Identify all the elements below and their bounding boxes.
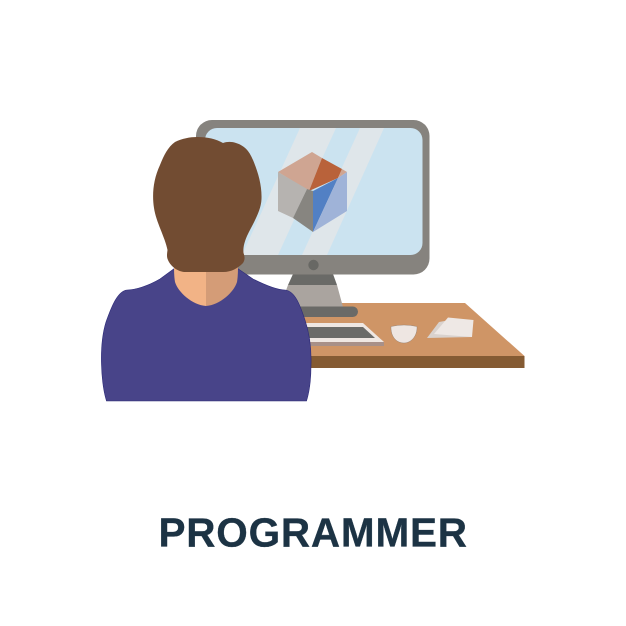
hair: [153, 137, 262, 272]
papers: [427, 318, 474, 338]
neck: [174, 262, 206, 306]
cup: [391, 325, 417, 343]
person: [101, 137, 311, 401]
keyboard: [300, 323, 384, 346]
monitor stand: [270, 274, 358, 317]
title: PROGRAMMER: [158, 510, 467, 556]
desk: [300, 303, 524, 368]
monitor: [196, 120, 430, 274]
icon: hexagon cube on screen: [278, 152, 347, 232]
shirt: [101, 268, 311, 401]
